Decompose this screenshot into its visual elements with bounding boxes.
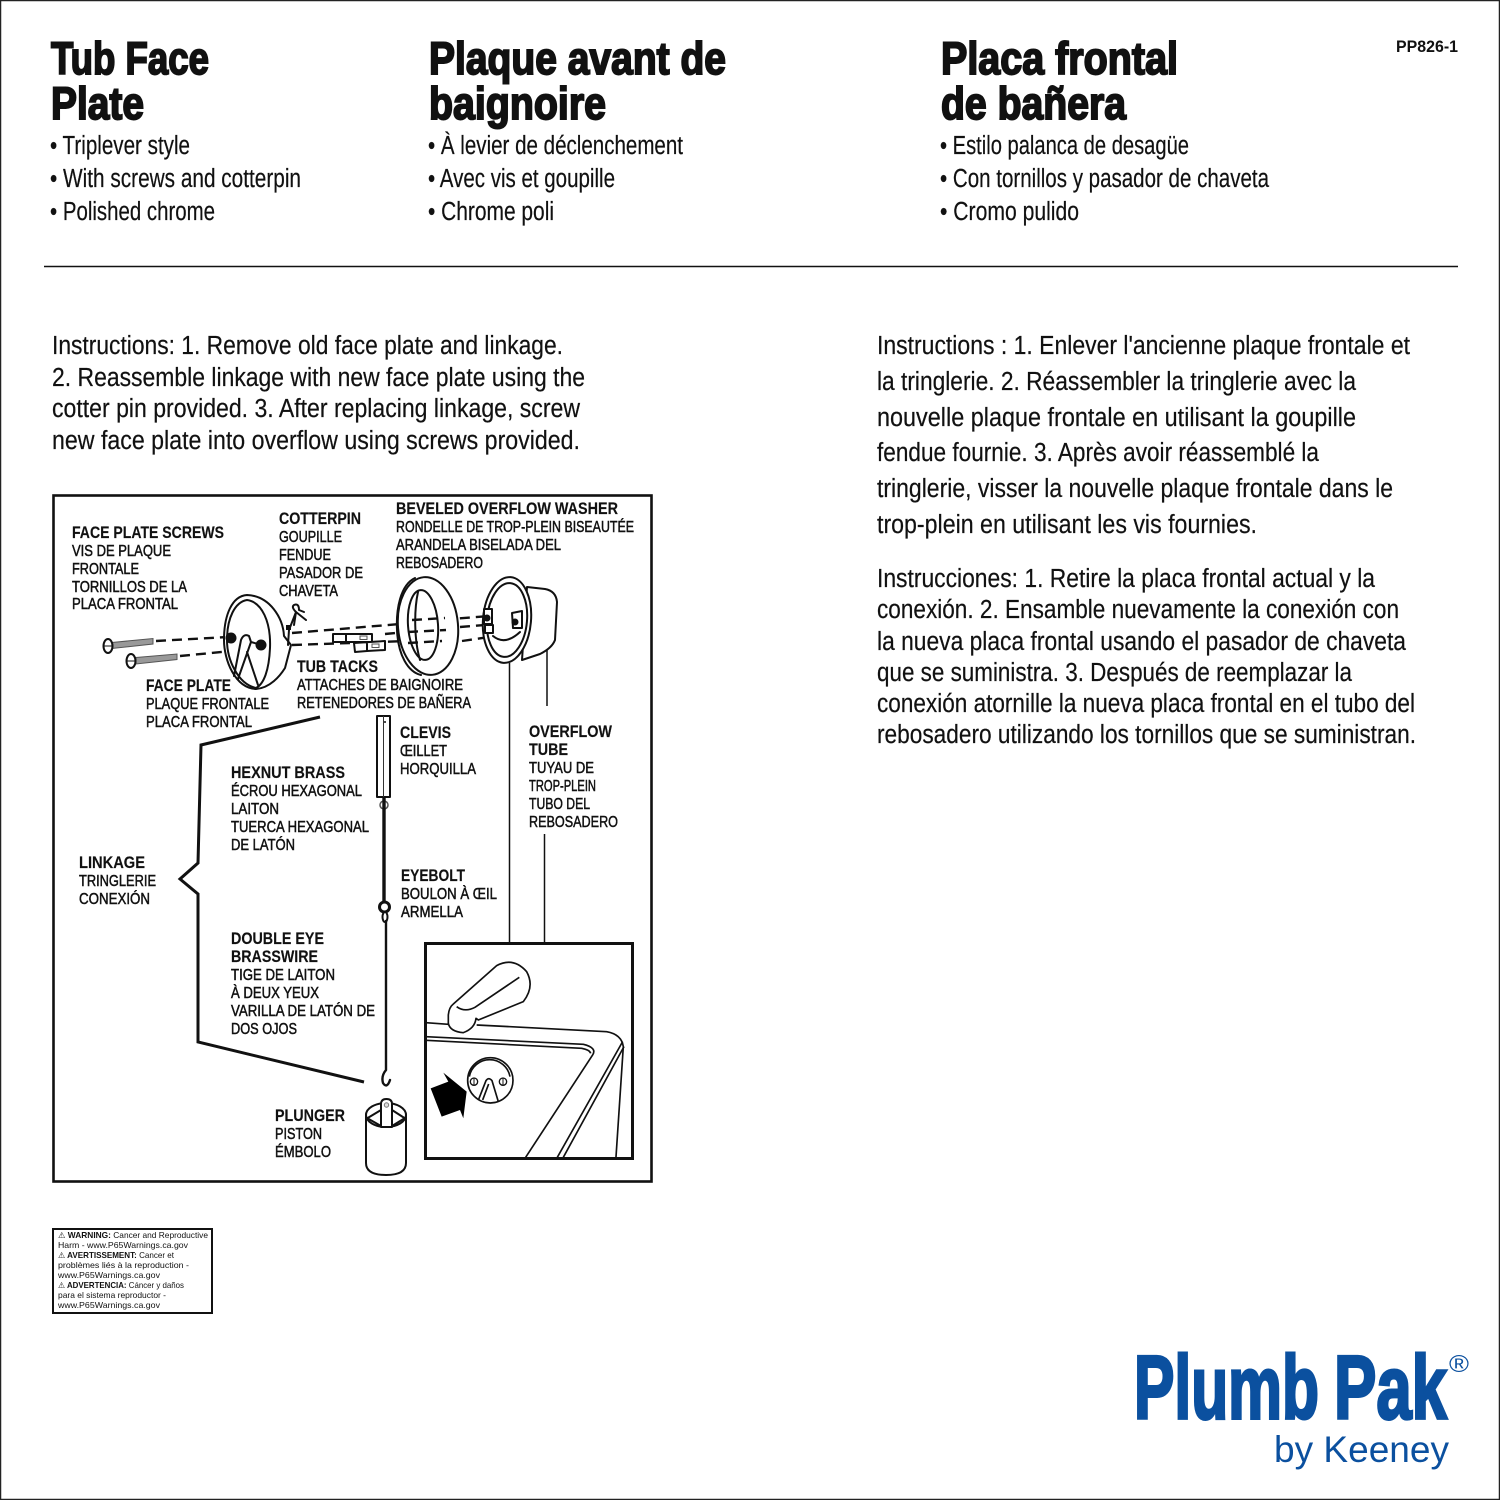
- label: overflow tube: TUYAU DE: [529, 760, 594, 777]
- panel: warning label: [53, 1229, 212, 1313]
- bullet list: English features: [50, 132, 301, 226]
- label: double eye brasswire: TIGE DE LAITON: [231, 967, 335, 984]
- icon: dashed assembly guide lines: [292, 616, 510, 645]
- label: linkage: TRINGLERIE: [79, 873, 156, 890]
- label: eyebolt: ARMELLA: [401, 904, 464, 921]
- label: overflow tube: TUBE: [529, 740, 568, 759]
- label: face plate: [146, 676, 269, 731]
- text block: Spanish instructions: Instrucciones: 1. Retire la placa frontal actual y la: [877, 565, 1376, 593]
- text block: English instructions: cotter pin provided. 3. After replacing linkage, screw: [52, 395, 581, 423]
- label: linkage: CONEXIÓN: [79, 891, 150, 908]
- icon: face plate: [224, 595, 291, 689]
- bullet list: French features: • Avec vis et goupille: [428, 165, 615, 193]
- label: plunger: ÉMBOLO: [275, 1144, 331, 1161]
- title: Placa frontal de bañera: Placa frontal: [941, 33, 1178, 84]
- panel: tub inset: [426, 944, 632, 1158]
- bullet list: Spanish features: • Estilo palanca de desagüe: [940, 132, 1189, 160]
- label: cotterpin: CHAVETA: [279, 583, 339, 600]
- text block: French instructions: Instructions : 1. Enlever l'ancienne plaque frontale et: [877, 332, 1410, 360]
- label: double eye brasswire: À DEUX YEUX: [231, 985, 320, 1002]
- label: hexnut brass: HEXNUT BRASS: [231, 763, 345, 782]
- label: cotterpin: PASADOR DE: [279, 565, 363, 582]
- label: cotterpin: FENDUE: [279, 547, 331, 564]
- label: linkage: LINKAGE: [79, 853, 145, 872]
- bullet list: French features: • À levier de déclenchement: [428, 131, 683, 160]
- title: Placa frontal de bañera: [941, 33, 1178, 129]
- product code: PP826-1: [1396, 38, 1458, 56]
- label: face plate: FACE PLATE: [146, 676, 231, 695]
- label: eyebolt: EYEBOLT: [401, 866, 465, 885]
- label: hexnut brass: [231, 763, 369, 854]
- text block: French instructions: nouvelle plaque frontale en utilisant la goupille: [877, 404, 1356, 432]
- icon: tub tacks: [333, 634, 385, 652]
- label: clevis: HORQUILLA: [400, 761, 477, 778]
- label: hexnut brass: ÉCROU HEXAGONAL: [231, 783, 362, 800]
- label: double eye brasswire: DOUBLE EYE: [231, 929, 324, 948]
- heading block: English: [50, 33, 301, 226]
- label: hexnut brass: LAITON: [231, 801, 279, 818]
- label: face plate screws: FRONTALE: [72, 561, 139, 578]
- text block: Spanish instructions: [877, 565, 1416, 749]
- bullet list: Spanish features: [940, 132, 1270, 226]
- bullet list: Spanish features: • Con tornillos y pasador de chaveta: [940, 165, 1270, 193]
- bullet list: English features: • Polished chrome: [50, 198, 215, 226]
- text block: Spanish instructions: rebosadero utilizando los tornillos que se suministran.: [877, 721, 1416, 749]
- label: clevis: CLEVIS: [400, 723, 451, 742]
- icon: double eye brasswire: [382, 921, 390, 1085]
- panel: warning label: www.P65Warnings.ca.gov: [57, 1301, 161, 1310]
- label: plunger: PLUNGER: [275, 1106, 345, 1125]
- text block: English instructions: new face plate into overflow using screws provided.: [52, 427, 580, 455]
- bullet list: English features: • With screws and cotterpin: [50, 165, 301, 193]
- icon: face plate screws: [104, 637, 232, 668]
- bullet list: French features: • Chrome poli: [428, 198, 554, 226]
- icon: eyebolt and rod: [380, 798, 390, 922]
- label: eyebolt: BOULON À ŒIL: [401, 886, 497, 903]
- label: tub tacks: ATTACHES DE BAIGNOIRE: [297, 677, 463, 694]
- panel: warning label: ⚠ ADVERTENCIA: Cáncer y daños: [58, 1280, 184, 1290]
- panel: warning label: para el sistema reproductor -: [58, 1291, 166, 1300]
- label: hexnut brass: TUERCA HEXAGONAL: [231, 819, 369, 836]
- label: double eye brasswire: BRASSWIRE: [231, 947, 318, 966]
- label: face plate: PLACA FRONTAL: [146, 714, 252, 731]
- label: tub tacks: TUB TACKS: [297, 657, 378, 676]
- label: face plate screws: FACE PLATE SCREWS: [72, 523, 224, 542]
- bullet list: English features: • Triplever style: [50, 132, 190, 160]
- label: eyebolt: [401, 866, 497, 921]
- icon: beveled overflow washer: [394, 575, 462, 677]
- label: clevis: ŒILLET: [400, 743, 447, 760]
- icon: cotterpin: [286, 605, 306, 645]
- icon: arrow pointing at face plate: [431, 1073, 467, 1118]
- label: hexnut brass: DE LATÓN: [231, 837, 295, 854]
- label: cotterpin: COTTERPIN: [279, 509, 361, 528]
- label: linkage: [79, 853, 156, 908]
- label: double eye brasswire: DOS OJOS: [231, 1021, 297, 1038]
- logo: Plumb Pak by Keeney: [1134, 1338, 1469, 1470]
- text block: Spanish instructions: la nueva placa frontal usando el pasador de chaveta: [877, 628, 1407, 656]
- icon: plunger: [366, 1099, 406, 1175]
- label: overflow tube: REBOSADERO: [529, 814, 618, 831]
- icon: spout: [448, 962, 530, 1033]
- label: plunger: PISTON: [275, 1126, 322, 1143]
- panel: exploded parts diagram: [54, 496, 652, 1182]
- label: plunger: [275, 1106, 345, 1161]
- label: face plate: PLAQUE FRONTALE: [146, 696, 269, 713]
- text block: French instructions: trop-plein en utilisant les vis fournies.: [877, 511, 1257, 539]
- label: overflow tube: TROP-PLEIN: [529, 778, 596, 795]
- text block: French instructions: [877, 332, 1410, 539]
- logo: Plumb Pak by Keeney: by Keeney: [1274, 1429, 1449, 1470]
- label: overflow tube: OVERFLOW: [529, 722, 613, 741]
- text block: French instructions: fendue fournie. 3. Après avoir réassemblé la: [877, 439, 1320, 467]
- text block: French instructions: tringlerie, visser la nouvelle plaque frontale dans le: [877, 475, 1393, 503]
- text block: English instructions: 2. Reassemble linkage with new face plate using the: [52, 364, 585, 392]
- icon: overflow tube lines: [510, 650, 547, 943]
- text block: English instructions: [52, 332, 585, 455]
- label: face plate screws: PLACA FRONTAL: [72, 596, 178, 613]
- icon: hexnut: [380, 801, 388, 809]
- title: Tub Face Plate: Tub Face: [51, 33, 209, 84]
- label: beveled overflow washer: BEVELED OVERFLOW WASHER: [396, 499, 618, 518]
- label: face plate screws: [72, 523, 224, 613]
- text block: Spanish instructions: que se suministra. 3. Después de reemplazar la: [877, 659, 1353, 687]
- panel: warning label: problèmes liés à la reproduction -: [58, 1261, 189, 1270]
- label: clevis: [400, 723, 477, 778]
- title: Plaque avant de baignoire: Plaque avant de: [429, 33, 726, 84]
- logo: Plumb Pak by Keeney: Plumb: [1134, 1338, 1319, 1438]
- heading block: French: [428, 33, 726, 226]
- icon: clevis: [377, 716, 390, 797]
- label: beveled overflow washer: RONDELLE DE TROP-PLEIN BISEAUTÉE: [396, 519, 634, 536]
- icon: linkage bracket: [180, 717, 364, 1082]
- heading block: Spanish: [940, 33, 1270, 226]
- text block: Spanish instructions: conexión atornille la nueva placa frontal en el tubo del: [877, 690, 1415, 718]
- bullet list: Spanish features: • Cromo pulido: [940, 198, 1079, 226]
- panel: warning label: Harm - www.P65Warnings.ca.gov: [58, 1241, 189, 1250]
- label: overflow tube: [529, 722, 618, 831]
- label: tub tacks: [297, 657, 472, 712]
- label: beveled overflow washer: [396, 499, 634, 572]
- title: Placa frontal de bañera: de bañera: [941, 78, 1127, 129]
- panel: warning label: ⚠ WARNING: Cancer and Reproductive: [58, 1230, 208, 1240]
- panel: warning label: www.P65Warnings.ca.gov: [57, 1271, 161, 1280]
- text block: French instructions: la tringlerie. 2. Réassembler la tringlerie avec la: [877, 368, 1357, 396]
- label: tub tacks: RETENEDORES DE BAÑERA: [297, 695, 472, 712]
- title: Tub Face Plate: [51, 33, 209, 129]
- bullet list: French features: [428, 131, 683, 226]
- logo: Plumb Pak by Keeney: Pak: [1334, 1338, 1448, 1438]
- text block: Spanish instructions: conexión. 2. Ensamble nuevamente la conexión con: [877, 596, 1399, 624]
- logo: Plumb Pak by Keeney: ®: [1449, 1351, 1469, 1378]
- icon: overflow elbow: [479, 575, 557, 665]
- label: cotterpin: [279, 509, 363, 600]
- label: double eye brasswire: [231, 929, 375, 1038]
- title: Plaque avant de baignoire: [429, 33, 726, 129]
- title: Plaque avant de baignoire: baignoire: [429, 78, 606, 129]
- title: Tub Face Plate: Plate: [51, 78, 144, 129]
- text block: English instructions: Instructions: 1. Remove old face plate and linkage.: [52, 332, 563, 360]
- label: beveled overflow washer: REBOSADERO: [396, 555, 483, 572]
- label: beveled overflow washer: ARANDELA BISELADA DEL: [396, 537, 561, 554]
- label: double eye brasswire: VARILLA DE LATÓN DE: [231, 1003, 375, 1020]
- label: cotterpin: GOUPILLE: [279, 529, 342, 546]
- label: face plate screws: TORNILLOS DE LA: [72, 579, 188, 596]
- label: overflow tube: TUBO DEL: [529, 796, 590, 813]
- label: face plate screws: VIS DE PLAQUE: [72, 543, 171, 560]
- icon: installed face plate: [468, 1058, 513, 1103]
- panel: warning label: ⚠ AVERTISSEMENT: Cancer et: [58, 1250, 175, 1260]
- icon: tub rim: [426, 1023, 624, 1157]
